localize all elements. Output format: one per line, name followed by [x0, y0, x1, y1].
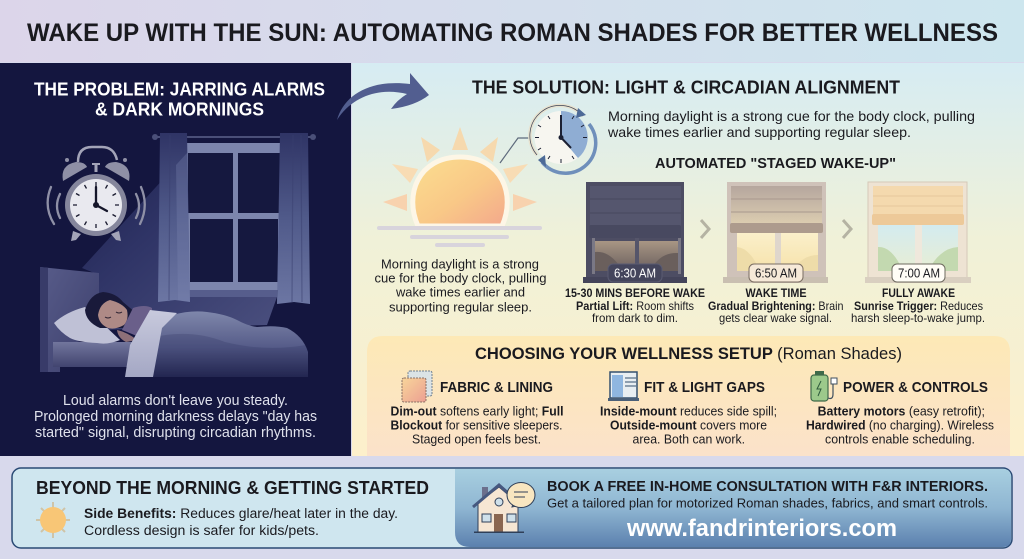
sun caption [374, 256, 546, 314]
panel: choosing your wellness setup [367, 336, 1010, 456]
consultation text: Get a tailored plan for motorized Roman shades, fabrics, and smart controls. [547, 496, 988, 510]
stage 2 caption: WAKE TIME [746, 286, 806, 300]
website url: www.fandrinteriors.com [626, 515, 897, 542]
setup heading: CHOOSING YOUR WELLNESS SETUP (Roman Shades) [475, 344, 902, 363]
icon: house with speech bubble [473, 482, 535, 533]
fit and light gaps heading: FIT & LIGHT GAPS [644, 379, 765, 396]
problem heading: & DARK MORNINGS [95, 100, 264, 120]
power and controls text: Battery motors (easy retrofit); [818, 404, 985, 418]
power and controls text: Hardwired (no charging). Wireless [806, 418, 994, 432]
fit and light gaps text: area. Both can work. [632, 432, 745, 446]
arrow: problem to solution [337, 73, 429, 120]
title banner [0, 0, 1024, 62]
window stage 2: 6:50 AM [723, 182, 828, 283]
light beam from window [82, 153, 277, 330]
chevron arrow 1 [701, 220, 709, 238]
panel: the solution background [352, 63, 1024, 456]
stage 1 caption: Partial Lift: Room shifts [576, 299, 694, 313]
power and controls text [806, 404, 994, 446]
problem heading: THE PROBLEM: JARRING ALARMS [34, 80, 325, 100]
time badge: 6:50 AM [755, 266, 797, 280]
power and controls heading: POWER & CONTROLS [843, 379, 988, 396]
title banner: WAKE UP WITH THE SUN: AUTOMATING ROMAN SHADES FOR BETTER WELLNESS [27, 19, 998, 47]
fabric and lining heading: FABRIC & LINING [440, 379, 553, 396]
stage 3 caption: Sunrise Trigger: Reduces [854, 299, 983, 313]
problem description: Prolonged morning darkness delays "day has [34, 409, 317, 425]
chevron arrow 2 [843, 220, 851, 238]
time badge: 7:00 AM [898, 266, 940, 280]
illustration: woman sleeping in bed [40, 267, 308, 377]
sun caption: Morning daylight is a strong [381, 256, 539, 272]
fabric and lining text: Staged open feels best. [412, 432, 541, 446]
panel: the problem [0, 63, 351, 456]
icon: small sun [36, 502, 70, 538]
side benefits text: Cordless design is safer for kids/pets. [84, 523, 319, 538]
sun caption: cue for the body clock, pulling [374, 270, 546, 286]
icon: window fit [608, 372, 639, 401]
fit and light gaps text: Inside-mount reduces side spill; [600, 404, 777, 418]
stage 3 caption: harsh sleep-to-wake jump. [851, 311, 985, 325]
fit and light gaps text: Outside-mount covers more [610, 418, 767, 432]
fabric and lining text [390, 404, 564, 446]
side benefits text [84, 506, 398, 538]
problem description: Loud alarms don't leave you steady. [63, 393, 288, 409]
icon: ringing alarm clock [48, 147, 145, 241]
problem heading [34, 80, 325, 120]
stage 1 caption: 15-30 MINS BEFORE WAKE [565, 286, 705, 300]
icon: rising sun [377, 127, 542, 247]
stage 3 caption [851, 286, 985, 325]
staged wake-up heading: AUTOMATED "STAGED WAKE-UP" [655, 155, 896, 172]
side benefits text: Side Benefits: Reduces glare/heat later in the day. [84, 506, 398, 521]
stage 2 caption [708, 286, 844, 325]
beyond the morning heading: BEYOND THE MORNING & GETTING STARTED [36, 478, 429, 498]
power and controls text: controls enable scheduling. [825, 432, 975, 446]
fabric and lining text: Blockout for sensitive sleepers. [390, 418, 562, 432]
panel: bottom band [12, 468, 1012, 548]
sun caption: wake times earlier and [395, 284, 525, 300]
solution intro text: Morning daylight is a strong cue for the body clock, pulling [608, 108, 975, 124]
icon: fabric swatch [402, 371, 432, 402]
solution intro text: wake times earlier and supporting regular sleep. [607, 124, 911, 140]
time badge: 6:30 AM [614, 266, 656, 280]
window stage 1: 6:30 AM [583, 182, 687, 283]
sun caption: supporting regular sleep. [389, 300, 532, 314]
stage 3 caption: FULLY AWAKE [882, 286, 955, 300]
stage 1 caption [565, 286, 705, 325]
problem description: started" signal, disrupting circadian rhythms. [35, 425, 316, 441]
fit and light gaps text [600, 404, 777, 446]
stage 2 caption: gets clear wake signal. [719, 311, 832, 325]
solution heading: THE SOLUTION: LIGHT & CIRCADIAN ALIGNMENT [472, 78, 900, 98]
problem description [34, 393, 317, 441]
icon: battery and plug [811, 371, 837, 401]
stage 2 caption: Gradual Brightening: Brain [708, 299, 844, 313]
icon: clock with cycle arrows [500, 105, 596, 173]
solution intro text [607, 108, 975, 140]
night window with curtains [152, 133, 316, 304]
fabric and lining text: Dim-out softens early light; Full [390, 404, 564, 418]
consultation heading: BOOK A FREE IN-HOME CONSULTATION WITH F&R INTERIORS. [547, 479, 988, 495]
window stage 3: 7:00 AM [865, 182, 971, 283]
stage 1 caption: from dark to dim. [592, 311, 678, 325]
panel: consultation call to action [455, 469, 1011, 547]
